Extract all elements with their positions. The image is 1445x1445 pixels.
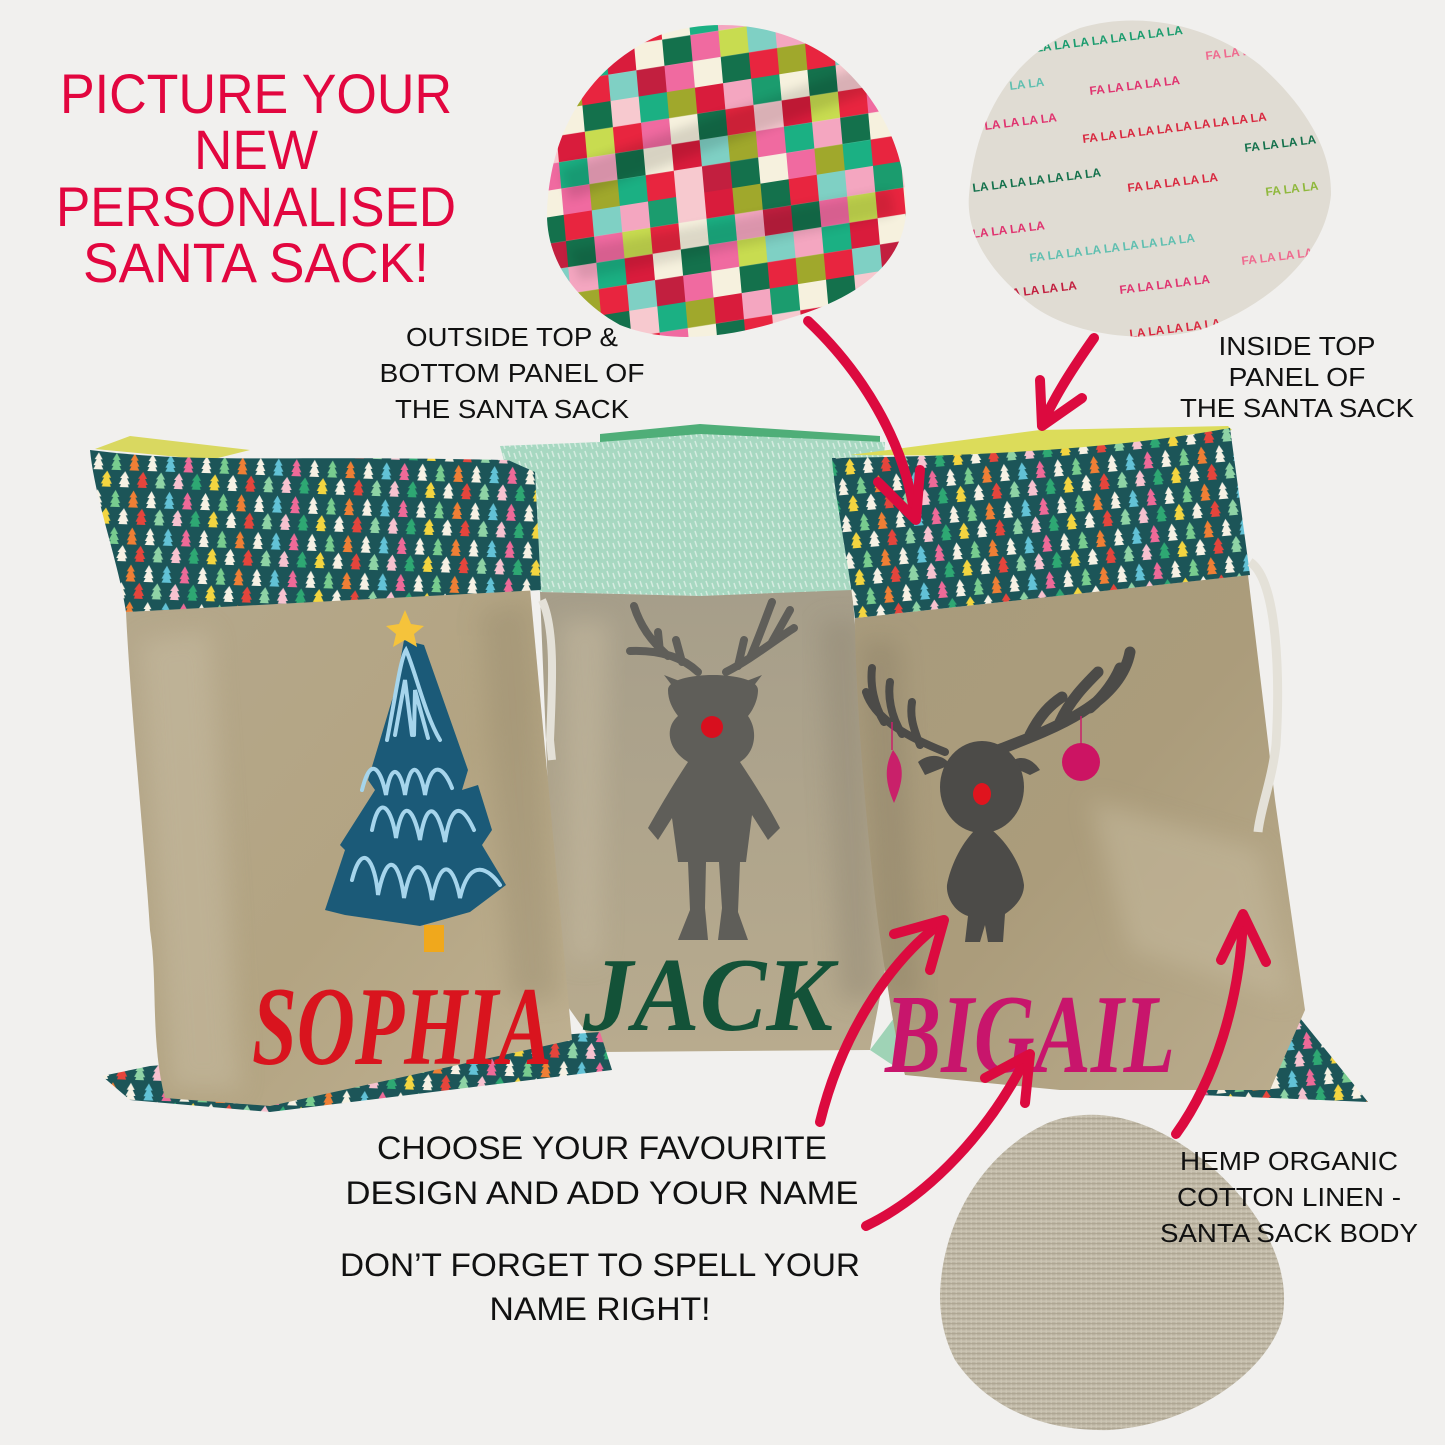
head and body xyxy=(648,675,780,940)
drawstring xyxy=(542,600,552,760)
text: spell your name right: DON’T FORGET TO SPELL YOUR xyxy=(340,1247,860,1283)
label: hemp organic cotton linen: HEMP ORGANIC xyxy=(1180,1146,1398,1176)
antlers xyxy=(630,602,794,672)
name: Sophia: SOPHIA xyxy=(252,965,552,1089)
swatch: inside fabric fa la la: FA LA LA LA LA LA LA LA LA LA xyxy=(1082,109,1268,146)
reindeer silhouette xyxy=(630,602,794,940)
christmas tree xyxy=(325,640,506,926)
left sack: Sophia tree xyxy=(90,436,612,1112)
swatch: inside fabric fa la la: LA LA LA LA LA xyxy=(1129,316,1222,341)
text: spell your name right xyxy=(340,1247,860,1327)
sack body xyxy=(540,590,885,1052)
red nose xyxy=(701,716,723,738)
label: inside top panel: PANEL OF xyxy=(1228,362,1366,392)
swatch: inside fabric fa la la: LA LA LA LA LA LA LA xyxy=(972,165,1102,195)
swatch: inside fabric fa la la: LA LA LA LA xyxy=(1004,278,1078,301)
red nose xyxy=(973,783,991,805)
label: hemp organic cotton linen: SANTA SACK BODY xyxy=(1160,1218,1418,1248)
label: inside top panel xyxy=(1180,331,1415,423)
fabric folds xyxy=(560,620,880,1000)
sack body xyxy=(855,575,1305,1090)
name: Abigail: BIGAIL xyxy=(883,973,1175,1097)
tree trunk xyxy=(424,925,444,952)
star xyxy=(386,610,424,647)
text: choose your favourite design xyxy=(346,1130,858,1211)
label: inside top panel: INSIDE TOP xyxy=(1218,331,1376,361)
swatch: inside fabric fa la la: LA LA LA LA LA LA LA LA xyxy=(1035,23,1184,55)
label: hemp organic cotton linen xyxy=(1160,1146,1418,1248)
text: choose your favourite design: CHOOSE YOUR FAVOURITE xyxy=(377,1130,827,1166)
right sack: Abigail reindeer xyxy=(832,426,1368,1102)
bottom fabric xyxy=(1200,1018,1368,1102)
arrow: spell your name xyxy=(866,1054,1030,1226)
ears xyxy=(664,675,762,696)
text: spell your name right: NAME RIGHT! xyxy=(490,1291,710,1327)
swatch: linen xyxy=(940,1115,1284,1430)
drawstring xyxy=(1250,562,1278,832)
middle sack: Jack reindeer xyxy=(500,424,885,1053)
body xyxy=(947,830,1024,942)
swatch: inside fabric fa la la: FA LA LA LA xyxy=(1241,245,1314,268)
antlers xyxy=(866,668,945,752)
swatch: inside fabric fa la la: FA LA LA LA LA xyxy=(1119,272,1211,297)
ornament: ball xyxy=(1062,716,1100,781)
title: SANTA SACK! xyxy=(83,231,429,294)
reindeer silhouette xyxy=(866,652,1130,942)
ornament: drop xyxy=(887,722,902,803)
tree panel xyxy=(832,428,1250,618)
title: NEW xyxy=(194,118,318,181)
tree panel xyxy=(90,450,541,612)
label: outside top and bottom panel: OUTSIDE TOP & xyxy=(406,322,618,352)
arrow: checks to outside panel xyxy=(808,321,920,520)
title xyxy=(56,62,456,294)
green stripe at top xyxy=(600,424,880,446)
title: PICTURE YOUR xyxy=(60,62,452,125)
swatch: inside fabric fa la la: FA LA LA xyxy=(1265,179,1319,199)
swatch: inside fabric fa la la xyxy=(968,20,1331,337)
swatch: outside fabric checks xyxy=(547,25,906,337)
swatch: inside fabric fa la la: FA LA LA xyxy=(1205,43,1259,63)
fabric folds xyxy=(140,600,560,1090)
fabric folds xyxy=(860,640,1290,1000)
swatch: inside fabric fa la la: LA LA LA LA xyxy=(972,218,1046,241)
arrow: choose design xyxy=(820,920,944,1122)
label: inside top panel: THE SANTA SACK xyxy=(1180,393,1415,423)
swatch: inside fabric fa la la: LA LA xyxy=(1009,75,1045,93)
sack body xyxy=(126,588,572,1106)
yellow lining xyxy=(850,426,1232,456)
green top panel xyxy=(500,434,885,596)
head xyxy=(940,741,1024,833)
name: Jack: JACK xyxy=(582,936,839,1053)
swatch: inside fabric fa la la: FA LA LA LA LA xyxy=(1127,170,1219,195)
swatch: inside fabric fa la la: FA LA LA LA xyxy=(1244,132,1317,155)
bottom fabric xyxy=(102,1032,612,1112)
label: outside top and bottom panel: THE SANTA SACK xyxy=(395,394,630,424)
text: choose your favourite design: DESIGN AND ADD YOUR NAME xyxy=(346,1175,858,1211)
swatch: inside fabric fa la la: LA LA LA LA xyxy=(984,110,1058,133)
arrow: fa la la to inside panel xyxy=(1040,338,1094,426)
swatch: inside fabric fa la la: FA LA LA LA LA xyxy=(1089,73,1181,98)
ears xyxy=(918,756,1040,775)
label: hemp organic cotton linen: COTTON LINEN - xyxy=(1177,1182,1401,1212)
label: outside top and bottom panel xyxy=(380,322,644,424)
tree squiggles xyxy=(352,650,500,900)
title: PERSONALISED xyxy=(56,175,456,238)
label: outside top and bottom panel: BOTTOM PANEL OF xyxy=(380,358,644,388)
arrow: linen to body xyxy=(1176,914,1266,1134)
yellow lining xyxy=(95,436,250,460)
swatch: inside fabric fa la la: FA LA LA LA LA LA LA LA LA xyxy=(1029,231,1196,265)
